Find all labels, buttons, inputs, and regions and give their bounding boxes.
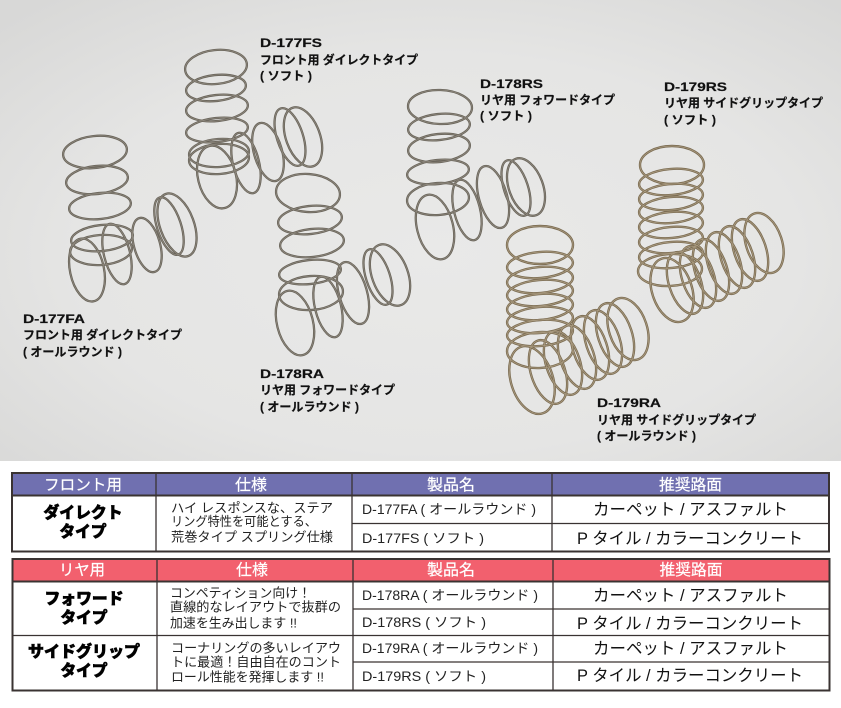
header row: front — [13, 474, 828, 495]
label: D-177FA: フロント用 ダイレクトタイプ — [23, 327, 182, 342]
label: D-178RA: D-178RA — [260, 367, 324, 381]
type: side grip — [28, 642, 140, 680]
description: forward — [170, 586, 341, 630]
surfaces: front: P タイル / カラーコンクリート — [577, 529, 803, 548]
products: rear — [362, 588, 538, 684]
description: side grip: ロール性能を発揮します !! — [171, 670, 324, 684]
products: front: D-177FS ( ソフト ) — [362, 531, 484, 546]
surfaces: front — [577, 501, 803, 548]
label: D-177FS: D-177FS — [260, 36, 322, 50]
header row: front: 仕様 — [235, 476, 267, 494]
header row: front: 推奨路面 — [659, 476, 722, 494]
header row: rear: 推奨路面 — [660, 561, 722, 579]
surfaces: rear: P タイル / カラーコンクリート — [577, 614, 803, 633]
description: direct — [171, 500, 333, 544]
label: D-177FA: ( オールラウンド ) — [23, 345, 122, 359]
spring: D-178RA — [270, 172, 418, 359]
description: forward: 直線的なレイアウトで抜群の — [170, 600, 341, 614]
header row: rear: 製品名 — [427, 561, 475, 579]
label: D-179RA — [597, 396, 756, 443]
label: D-178RA — [260, 367, 395, 414]
label: D-177FS: ( ソフト ) — [260, 69, 312, 83]
label: D-178RA: ( オールラウンド ) — [260, 400, 359, 414]
products: rear: D-178RA ( オールラウンド ) — [362, 588, 538, 603]
label: D-179RA: ( オールラウンド ) — [597, 429, 696, 443]
header row: rear: リヤ用 — [59, 562, 105, 579]
label: D-179RS: リヤ用 サイドグリップタイプ — [664, 95, 823, 110]
label: D-177FA — [23, 312, 182, 359]
surfaces: rear: カーペット / アスファルト — [593, 640, 788, 658]
product photo background — [0, 0, 841, 461]
type: forward: フォワード — [44, 591, 124, 608]
description: direct: リング特性を可能とする、 — [171, 514, 317, 529]
label: D-179RS — [664, 80, 823, 127]
products: rear: D-179RA ( オールラウンド ) — [362, 641, 538, 656]
table: front springs — [12, 473, 829, 552]
header row: front: 製品名 — [427, 476, 475, 494]
description: side grip: コーナリングの多いレイアウ — [171, 640, 341, 656]
spring: D-179RS — [637, 146, 791, 328]
header row: rear — [14, 560, 828, 581]
surfaces: front: カーペット / アスファルト — [593, 501, 788, 519]
label: D-179RS: ( ソフト ) — [664, 113, 716, 127]
type: direct — [44, 503, 122, 541]
header row: rear: 仕様 — [236, 561, 268, 579]
description: forward: コンペティション向け！ — [170, 586, 311, 600]
label: D-178RS: リヤ用 フォワードタイプ — [480, 93, 615, 107]
description: direct: ハイ レスポンスな、ステア — [171, 500, 333, 516]
label: D-178RS: ( ソフト ) — [480, 109, 532, 123]
type: forward — [44, 591, 124, 627]
products: rear: D-178RS ( ソフト ) — [362, 615, 486, 630]
label: D-177FS — [260, 36, 418, 83]
description: side grip: トに最適！自由自在のコント — [171, 654, 341, 670]
label: D-178RS — [480, 77, 615, 123]
surfaces: rear — [577, 587, 803, 685]
surfaces: rear: P タイル / カラーコンクリート — [577, 666, 803, 685]
spring: D-177FA — [62, 133, 204, 305]
table: rear springs — [12, 559, 830, 690]
spring: D-179RA — [501, 226, 656, 420]
label: D-179RA: D-179RA — [597, 396, 661, 410]
type: forward: タイプ — [60, 608, 108, 627]
label: D-179RS: D-179RS — [664, 80, 727, 94]
label: D-177FA: D-177FA — [23, 312, 85, 326]
label: D-177FS: フロント用 ダイレクトタイプ — [260, 52, 418, 67]
label: D-179RA: リヤ用 サイドグリップタイプ — [597, 412, 756, 427]
description: side grip — [171, 640, 341, 684]
label: D-178RA: リヤ用 フォワードタイプ — [260, 383, 395, 397]
type: direct: ダイレクト — [44, 503, 122, 522]
products: front — [362, 502, 536, 546]
spring: D-178RS — [406, 89, 552, 263]
surfaces: rear: カーペット / アスファルト — [593, 587, 788, 605]
header row: front: フロント用 — [44, 477, 122, 494]
type: direct: タイプ — [60, 522, 106, 541]
description: direct: 荒巻タイプ スプリング仕様 — [171, 530, 333, 544]
type: side grip: タイプ — [60, 661, 108, 680]
products: front: D-177FA ( オールラウンド ) — [362, 502, 536, 517]
products: rear: D-179RS ( ソフト ) — [362, 669, 486, 684]
description: forward: 加速を生み出します !! — [170, 616, 297, 630]
spring: D-177FS — [183, 47, 330, 213]
label: D-178RS: D-178RS — [480, 77, 543, 91]
type: side grip: サイドグリップ — [28, 642, 140, 661]
